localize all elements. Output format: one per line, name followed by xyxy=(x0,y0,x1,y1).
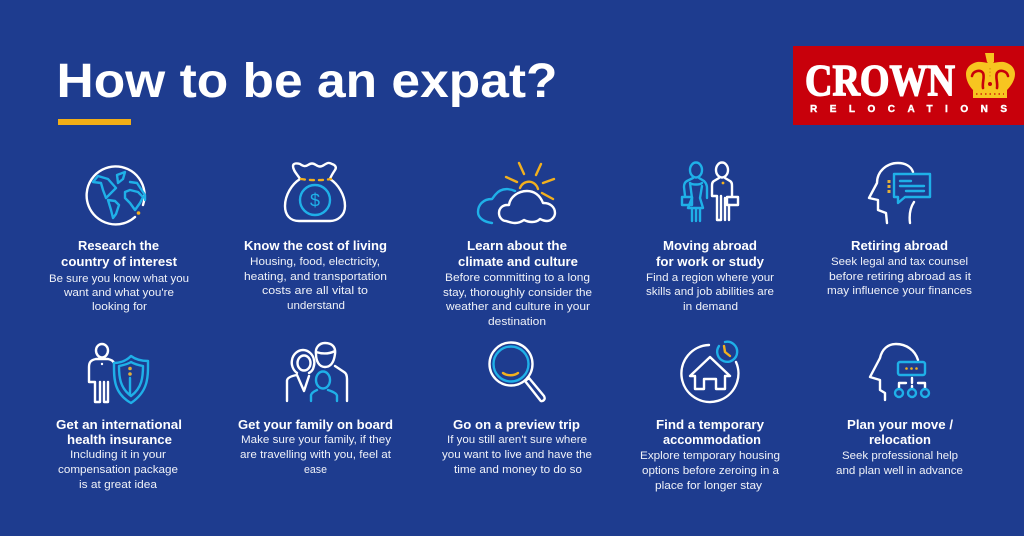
item: know the cost of living: heating, and transportation xyxy=(244,271,387,283)
item: find a temporary accommodation: place for longer stay xyxy=(655,480,762,492)
title: How to be an expat? xyxy=(56,55,558,108)
logo: Crown Relocations: CROWN xyxy=(805,56,955,105)
icon: money bag: $ xyxy=(310,190,320,210)
item: know the cost of living: Know the cost of living xyxy=(244,239,387,253)
item: get your family on board: Get your family on board xyxy=(238,418,393,432)
icon: money bag xyxy=(285,163,345,221)
item: learn about the climate and culture xyxy=(443,163,592,328)
item: retiring abroad: Retiring abroad xyxy=(851,239,948,253)
item: find a temporary accommodation: Explore temporary housing xyxy=(640,450,780,462)
title underline xyxy=(58,119,131,125)
item: research the country of interest: looking for xyxy=(92,301,147,313)
item: retiring abroad: Seek legal and tax counsel xyxy=(831,256,968,268)
item: plan your move / relocation: Plan your move / xyxy=(847,418,954,432)
item: get an international health insurance: health insurance xyxy=(67,433,172,447)
item: learn about the climate and culture: Learn about the xyxy=(467,239,567,253)
item: go on a preview trip: time and money to do so xyxy=(454,464,582,476)
icon: sun and clouds xyxy=(478,163,555,223)
item: go on a preview trip: Go on a preview trip xyxy=(453,418,580,432)
item: know the cost of living: Housing, food, electricity, xyxy=(250,256,380,268)
icon: head with speech bubble xyxy=(869,163,930,223)
icon: head with network xyxy=(870,344,929,400)
icon: two professionals with briefcases xyxy=(682,162,738,221)
item: go on a preview trip: If you still aren't sure where xyxy=(447,434,587,446)
item: find a temporary accommodation: accommodation xyxy=(663,433,761,447)
item: get an international health insurance xyxy=(56,344,182,491)
item: learn about the climate and culture: destination xyxy=(488,316,546,328)
icon: globe xyxy=(87,166,145,224)
logo: Crown Relocations: RELOCATIONS xyxy=(810,104,1007,115)
item: get your family on board: Make sure your family, if they xyxy=(241,434,391,446)
item: moving abroad for work or study: skills and job abilities are xyxy=(646,286,774,298)
item: moving abroad for work or study: Moving abroad xyxy=(663,239,757,253)
item: know the cost of living: understand xyxy=(287,300,345,312)
item: get an international health insurance: compensation package xyxy=(58,464,178,476)
item: research the country of interest: want and what you're xyxy=(63,287,174,299)
icon: family xyxy=(287,343,347,401)
item: get an international health insurance: Get an international xyxy=(56,418,182,432)
item: go on a preview trip: you want to live and have the xyxy=(442,449,592,461)
item: get your family on board: are travelling with you, feel at xyxy=(240,449,392,461)
item: learn about the climate and culture: climate and culture xyxy=(458,255,578,269)
item: learn about the climate and culture: stay, thoroughly consider the xyxy=(443,287,592,299)
item: moving abroad for work or study: for work or study xyxy=(656,255,764,269)
item: go on a preview trip xyxy=(442,342,592,476)
item: research the country of interest xyxy=(49,166,189,313)
item: moving abroad for work or study: in demand xyxy=(683,301,738,313)
item: retiring abroad: may influence your finances xyxy=(827,285,972,297)
item: plan your move / relocation: and plan well in advance xyxy=(836,465,963,477)
item: get an international health insurance: Including it in your xyxy=(70,449,166,461)
icon: crown xyxy=(966,53,1015,98)
item: retiring abroad: before retiring abroad as it xyxy=(829,271,972,283)
item: moving abroad for work or study xyxy=(646,162,774,313)
icon: magnifying glass xyxy=(490,342,545,401)
item: learn about the climate and culture: weather and culture in your xyxy=(445,301,590,313)
item: get an international health insurance: is at great idea xyxy=(79,479,158,491)
item: research the country of interest: country of interest xyxy=(61,255,178,269)
item: plan your move / relocation: relocation xyxy=(869,433,931,447)
item: get your family on board xyxy=(238,343,393,476)
item: get your family on board: ease xyxy=(304,464,327,476)
item: research the country of interest: Research the xyxy=(78,239,159,253)
item: plan your move / relocation: Seek professional help xyxy=(842,450,958,462)
item: research the country of interest: Be sure you know what you xyxy=(49,273,189,285)
item: learn about the climate and culture: Before committing to a long xyxy=(445,272,590,284)
item: find a temporary accommodation: Find a temporary xyxy=(656,418,764,432)
icon: house with clock xyxy=(681,342,738,402)
item: find a temporary accommodation xyxy=(640,342,780,492)
logo: Crown Relocations xyxy=(793,46,1024,125)
item: plan your move / relocation xyxy=(836,344,963,477)
item: find a temporary accommodation: options before zeroing in a xyxy=(642,465,780,477)
item: retiring abroad xyxy=(827,163,972,297)
icon: person with shield xyxy=(89,344,148,403)
item: know the cost of living xyxy=(244,163,387,312)
item: know the cost of living: costs are all vital to xyxy=(262,285,368,297)
item: moving abroad for work or study: Find a region where your xyxy=(646,272,774,284)
